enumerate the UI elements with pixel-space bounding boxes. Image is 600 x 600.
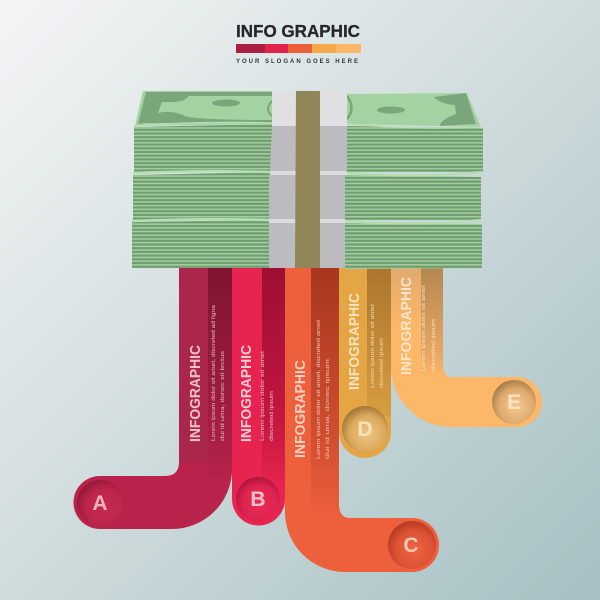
heading A: INFOGRAPHIC xyxy=(188,344,204,442)
body text B: discreted ipsum xyxy=(269,390,275,441)
body text E: Lorem ipsum dolor sit amet xyxy=(421,284,427,371)
badge A: A xyxy=(92,492,108,515)
badge B: B xyxy=(250,488,266,511)
heading D: INFOGRAPHIC xyxy=(347,292,363,390)
heading E: INFOGRAPHIC xyxy=(399,276,415,375)
body text A: dui id uma, donec sit lectus xyxy=(220,351,226,441)
ribbon D xyxy=(339,262,391,458)
ribbon E xyxy=(391,262,542,427)
body text B: Lorem ipsum dolor sit amet xyxy=(260,350,266,441)
body text A: Lorem ipsum dolor sit amet, discreted ad ligna xyxy=(211,304,217,441)
body text D: Lorem ipsum dolor sit amet xyxy=(370,303,376,388)
body text E: discreted ipsum xyxy=(431,318,437,371)
top bill left xyxy=(135,91,272,126)
badge B xyxy=(236,477,280,521)
heading C: INFOGRAPHIC xyxy=(293,359,309,458)
badge C xyxy=(388,521,436,569)
body text C: dui id uma, donec ipsum xyxy=(325,358,331,459)
badge D xyxy=(342,406,388,452)
slogan: YOUR SLOGAN GOES HERE xyxy=(236,59,358,65)
paper band xyxy=(269,91,347,268)
ribbon A xyxy=(74,262,232,529)
right stack xyxy=(345,124,483,269)
top bill right xyxy=(347,93,481,127)
colour bar xyxy=(236,44,361,53)
body text D: discreted ipsum xyxy=(379,337,385,388)
title block xyxy=(236,21,361,65)
left stack xyxy=(132,122,272,268)
badge E xyxy=(492,380,536,424)
money stack xyxy=(132,91,483,269)
title: INFO GRAPHIC xyxy=(236,21,360,41)
body text C: Lorem ipsum dolor sit amet, discreted amet xyxy=(316,319,322,459)
ribbon C xyxy=(285,262,439,572)
heading B: INFOGRAPHIC xyxy=(239,344,255,442)
badge C: C xyxy=(403,534,419,557)
badge D: D xyxy=(357,418,373,441)
ribbon B xyxy=(232,262,285,526)
badge E: E xyxy=(507,391,521,414)
badge A xyxy=(77,480,123,526)
